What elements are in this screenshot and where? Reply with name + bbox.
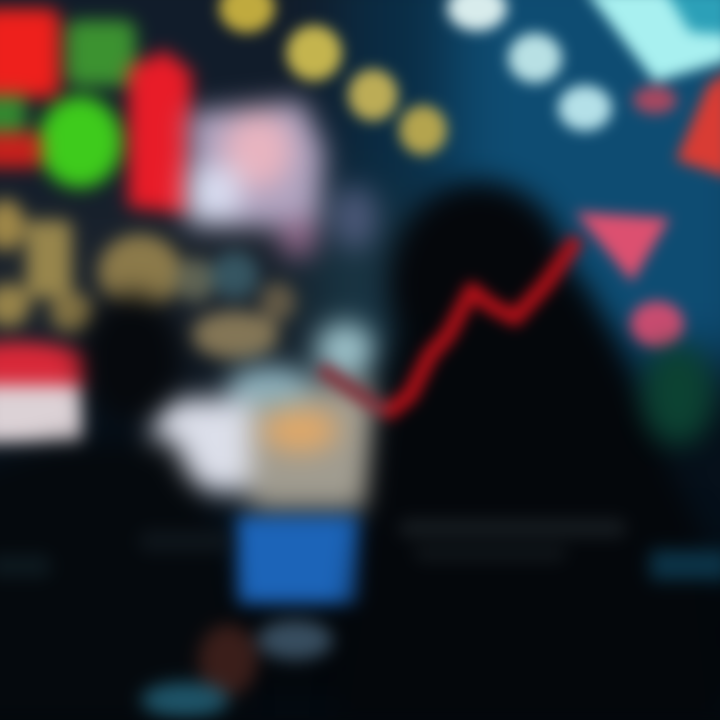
left silhouette xyxy=(0,276,248,606)
pale screen xyxy=(186,100,377,258)
top left green and red ticker tiles xyxy=(0,8,192,214)
center bright screens xyxy=(152,322,378,511)
right silhouette xyxy=(332,164,694,615)
lower left red and white panel xyxy=(0,342,88,443)
white dots and top right sign xyxy=(447,0,720,131)
faint lower details xyxy=(0,520,720,718)
left golden numbers xyxy=(0,199,296,359)
background wall xyxy=(0,0,720,543)
pink and red accents on right xyxy=(575,70,720,347)
green glow right xyxy=(642,345,714,445)
yellow dots diagonal xyxy=(219,0,447,155)
blue panel xyxy=(236,516,362,604)
red trend line xyxy=(320,238,578,415)
